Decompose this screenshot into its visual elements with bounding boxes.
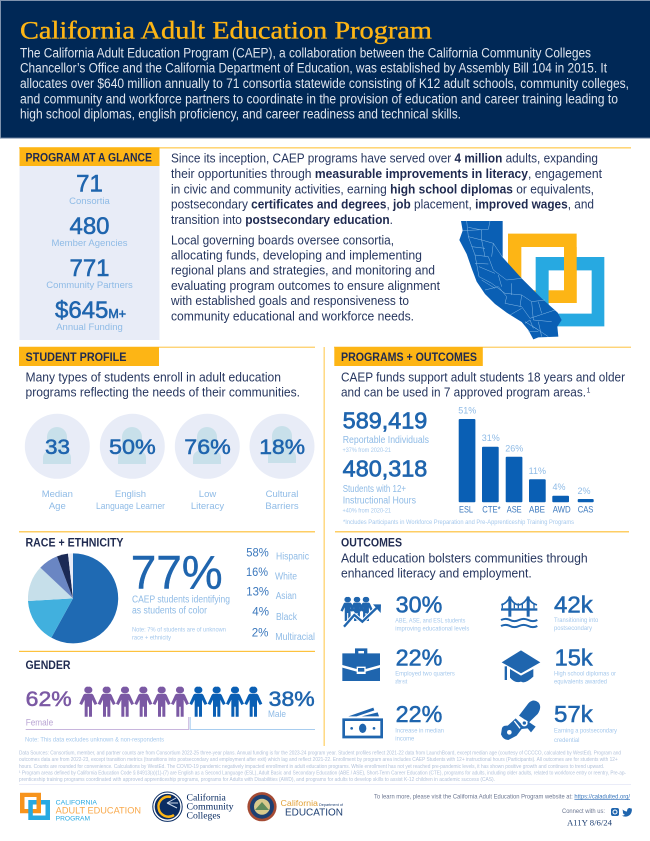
- legend: race list: Hispanic: [276, 552, 309, 563]
- stat: low literacy: Literacy: [191, 501, 224, 512]
- bar chart: program areas: 26%: [505, 444, 523, 454]
- legend: race list: Asian: [276, 591, 297, 602]
- logo: california adult education program: PROGRAM: [56, 815, 90, 822]
- text block: governance: allocating funds, developing and implementing: [171, 248, 422, 262]
- icon: money: [342, 708, 383, 738]
- panel: gender: [19, 651, 315, 744]
- icon: instagram: [611, 808, 619, 816]
- stat: 57k: [554, 701, 618, 744]
- icon: california map with interlocked squares: [459, 221, 604, 339]
- stat: 15k: 15k: [555, 644, 593, 670]
- logo: california adult education program: [20, 793, 141, 822]
- stat: cultural barriers: 18%: [259, 436, 305, 459]
- intro text: Many types of students enroll in adult education: [26, 370, 281, 385]
- logo: california community colleges: Colleges: [186, 810, 221, 821]
- stat: community partners: Community Partners: [46, 280, 133, 291]
- bar chart: program areas: ASE: [507, 504, 522, 514]
- pie chart: [28, 553, 118, 643]
- stat: 42k: [554, 591, 599, 632]
- text block: program history: their opportunities through measurable improvements in literacy, engagement: [171, 166, 602, 181]
- text block: governance: regional plans and strategies, and monitoring and: [171, 263, 435, 278]
- text block: program history: transition into postsecondary education.: [171, 212, 393, 227]
- icon: bridge: [501, 597, 537, 627]
- heading: PROGRAMS + OUTCOMES: [341, 352, 477, 364]
- stat: english language learner: English: [115, 489, 146, 500]
- text block: program history: [171, 151, 602, 227]
- stat: cultural barriers: Cultural: [266, 489, 298, 500]
- stat: 77 percent: [131, 545, 230, 641]
- stat: low literacy: 76%: [184, 436, 231, 459]
- stat: male: Male: [268, 709, 286, 720]
- stat: 30 percent: [395, 591, 469, 632]
- intro text: CAEP funds support adult students 18 years and older: [341, 370, 626, 385]
- stat: reportable individuals: 589,419: [343, 407, 427, 433]
- stat: consortia: Consortia: [69, 196, 111, 207]
- intro text: programs reflecting the needs of their communities.: [26, 385, 300, 400]
- heading: STUDENT PROFILE: [26, 352, 127, 364]
- stat: 15k: equivalents awarded: [554, 679, 607, 686]
- stat: community partners: 771: [69, 255, 110, 282]
- stat: students with 12+ hours: +40% from 2020-21: [342, 508, 391, 515]
- legend: race list: White: [275, 571, 297, 582]
- legend: race list: 13%: [246, 585, 269, 599]
- stat: median age: Age: [49, 501, 66, 512]
- stat: consortia: 71: [76, 171, 103, 198]
- text block: governance: with established goals and responsiveness to: [170, 293, 409, 308]
- text block: data sources: prenticeship training programs coordinated with approved apprenticeship programs, programs for Adults with Disabilities (AWD), and programs for adults to develop skills to assist K-12 children in academic success (CAS).: [19, 777, 495, 783]
- legend: race list: 16%: [246, 565, 268, 579]
- intro text: enhanced literacy and employment.: [341, 566, 532, 581]
- stat: cultural barriers: [250, 414, 314, 512]
- stat: students with 12+ hours: Students with 12+: [343, 484, 406, 495]
- stat: female: [26, 688, 72, 729]
- stat: 77 percent: Note: 7% of students are of unknown: [132, 626, 226, 633]
- stat: students with 12+ hours: [342, 456, 427, 515]
- stat: employed: after exit: [395, 678, 407, 685]
- legend: race list: 58%: [246, 545, 269, 559]
- icon: diploma: [501, 701, 540, 740]
- panel: program at a glance: [19, 147, 631, 340]
- text: connect with us: Connect with us:: [562, 808, 605, 815]
- logo: california department of education: Department of: [319, 803, 343, 807]
- stat: 77 percent: CAEP students identifying: [132, 594, 230, 605]
- stat: reportable individuals: Reportable Individuals: [343, 435, 429, 446]
- logo: california department of education: [247, 792, 343, 821]
- heading: OUTCOMES: [341, 537, 402, 549]
- bar chart: program areas: AWD: [553, 504, 571, 514]
- intro paragraph: high school diplomas, english proficiency, and career readiness and technical skills.: [20, 107, 461, 122]
- pictogram: people: [79, 687, 262, 717]
- vertical divider: [324, 347, 325, 746]
- stat: 57k: Earning a postsecondary: [554, 727, 618, 734]
- panel: outcomes: [335, 531, 629, 744]
- stat: english language learner: [96, 414, 165, 512]
- bar chart: program areas: 2%: [577, 486, 591, 496]
- icon: briefcase: [342, 648, 380, 681]
- bar chart: program areas: ESL: [459, 504, 473, 514]
- intro text: Adult education bolsters communities through: [341, 550, 588, 565]
- legend: race list: [246, 545, 315, 643]
- stat: consortia: [69, 171, 111, 207]
- stat: 42k: 42k: [554, 591, 593, 617]
- stat: students with 12+ hours: 480,318: [343, 456, 427, 482]
- stat: male: [268, 688, 315, 720]
- logo: california department of education: EDUCATION: [285, 807, 343, 818]
- bar chart: program areas: 31%: [482, 433, 500, 443]
- panel: programs and outcomes: [334, 347, 631, 526]
- stat: median income: [395, 701, 444, 742]
- stat: employed: Employed two quarters: [395, 670, 455, 677]
- text block: data sources: [19, 750, 626, 783]
- stat: 42k: Transitioning into: [554, 617, 599, 624]
- stat: female: Female: [26, 718, 53, 729]
- stat: cultural barriers: Barriers: [265, 501, 299, 512]
- intro text: and can be used in 7 approved program areas.: [341, 385, 586, 400]
- footnote: *Includes Participants in Workforce Preparation and Pre-Apprenticeship Training Programs: [343, 519, 574, 526]
- bar chart: program areas: CTE*: [482, 504, 501, 514]
- panel: race and ethnicity: [19, 531, 315, 643]
- intro text: 1: [586, 388, 590, 394]
- icon: twitter bird: [622, 808, 632, 817]
- intro text: [26, 370, 300, 400]
- text block: program history: in civic and community activities, earning high school diplomas or equivalents,: [171, 181, 594, 196]
- stat: female: 62%: [26, 688, 72, 711]
- stat: 77 percent: as students of color: [132, 606, 208, 617]
- text block: program history: postsecondary certificates and degrees, job placement, improved wages, and: [171, 197, 594, 212]
- stat: median age: 33: [45, 436, 70, 459]
- logo: california adult education program: ADULT EDUCATION: [56, 805, 141, 815]
- stat: 30 percent: ABE, ASE, and ESL students: [395, 617, 465, 624]
- stat: member agencies: [51, 213, 128, 249]
- note: Note: This data excludes unknown & non-respondents: [25, 737, 164, 744]
- stat: median age: Median: [42, 489, 73, 500]
- panel: student profile: [19, 347, 315, 512]
- stat: 42k: postsecondary: [554, 625, 593, 632]
- text block: governance: Local governing boards oversee consortia,: [171, 232, 394, 247]
- intro paragraph: The California Adult Education Program (CAEP), a collaboration between the California Community Colleges: [20, 45, 591, 60]
- stat: median income: Increase in median: [395, 727, 444, 734]
- text block: data sources: hours. Counts are rounded for convenience. Calculations by WestEd. The COVID-19 pandemic negatively impacted enrollment in adult education programs. While enrollment has not yet reached pre-pandemic levels, it has shown positive growth and continues to trend upward.: [19, 764, 604, 770]
- legend: race list: Black: [276, 612, 298, 623]
- stat: reportable individuals: +37% from 2020-21: [342, 447, 391, 454]
- stat: 77 percent: race + ethnicity: [132, 634, 172, 641]
- text block: governance: evaluating program outcomes to ensure alignment: [171, 278, 440, 293]
- logo: california community colleges: Community: [186, 802, 234, 813]
- logo: california department of education: California: [280, 798, 318, 808]
- stat: male: 38%: [269, 688, 315, 711]
- stat: employed: 22%: [396, 644, 442, 670]
- stat: 57k: 57k: [554, 701, 593, 727]
- icon: graduation cap: [502, 650, 540, 682]
- bar chart: program areas: 4%: [552, 482, 566, 492]
- header banner: [0, 0, 650, 139]
- stat: employed: [395, 644, 455, 685]
- text block: data sources: outcomes data are from 2022-23, except transition metrics (transitions into postsecondary and employment after exit) which lag and reflect 2021-22. Enrollment by program area includes CAEP Students with 12+ instructional hours (Participants). All outcomes are for students with 12+: [19, 757, 618, 763]
- stat: annual funding: $645M+: [55, 297, 126, 324]
- logo: california community colleges: [153, 792, 234, 821]
- stat: 15k: [554, 644, 616, 686]
- bar chart: program areas: 11%: [529, 466, 546, 476]
- intro text: [341, 550, 588, 581]
- legend: race list: Multiracial: [275, 632, 315, 643]
- heading: PROGRAM AT A GLANCE: [26, 153, 152, 165]
- stat: member agencies: 480: [69, 213, 110, 240]
- stat: 15k: High school diplomas or: [554, 671, 616, 678]
- intro paragraph: [20, 45, 629, 122]
- text: website link: To learn more, please visit the California Adult Education Program website at: https://caladulted.org/: [374, 793, 630, 800]
- stat: low literacy: [175, 414, 240, 512]
- stat: median income: 22%: [396, 701, 442, 727]
- text block: governance: [170, 232, 440, 324]
- stat: english language learner: Language Learner: [96, 501, 165, 512]
- stat: reportable individuals: [342, 407, 429, 454]
- bar chart: program areas: [458, 405, 594, 514]
- stat: 57k: credential: [554, 737, 580, 744]
- stat: 30 percent: 30%: [396, 591, 442, 617]
- stat: median income: income: [395, 735, 415, 742]
- stat: low literacy: Low: [199, 489, 216, 500]
- bar chart: program areas: 51%: [458, 405, 476, 415]
- intro text: [341, 370, 626, 400]
- stat: english language learner: 50%: [109, 436, 156, 459]
- stat: students with 12+ hours: Instructional Hours: [343, 496, 416, 507]
- stat: community partners: [46, 255, 133, 291]
- text block: program history: Since its inception, CAEP programs have served over 4 million adults, expanding: [171, 151, 598, 166]
- heading: RACE + ETHNICITY: [26, 538, 124, 550]
- stat: 30 percent: improving educational levels: [395, 625, 469, 632]
- stat: annual funding: Annual Funding: [56, 322, 123, 333]
- icon: people and rising arrow: [340, 597, 381, 627]
- text block: governance: community educational and workforce needs.: [171, 308, 414, 324]
- heading: GENDER: [26, 660, 71, 672]
- stat: median age: [25, 414, 90, 512]
- stat: member agencies: Member Agencies: [51, 238, 128, 249]
- text: accessibility date: A11Y 8/6/24: [567, 819, 612, 828]
- bar chart: program areas: ABE: [529, 504, 545, 514]
- legend: race list: 4%: [252, 605, 269, 619]
- logo: california community colleges: California: [186, 793, 226, 804]
- bar chart: program areas: CAS: [578, 504, 593, 514]
- legend: race list: 2%: [252, 626, 269, 640]
- logo: california adult education program: CALIFORNIA: [56, 799, 98, 806]
- title: California Adult Education Program: [20, 18, 433, 45]
- stat: 77 percent: 77%: [131, 545, 223, 598]
